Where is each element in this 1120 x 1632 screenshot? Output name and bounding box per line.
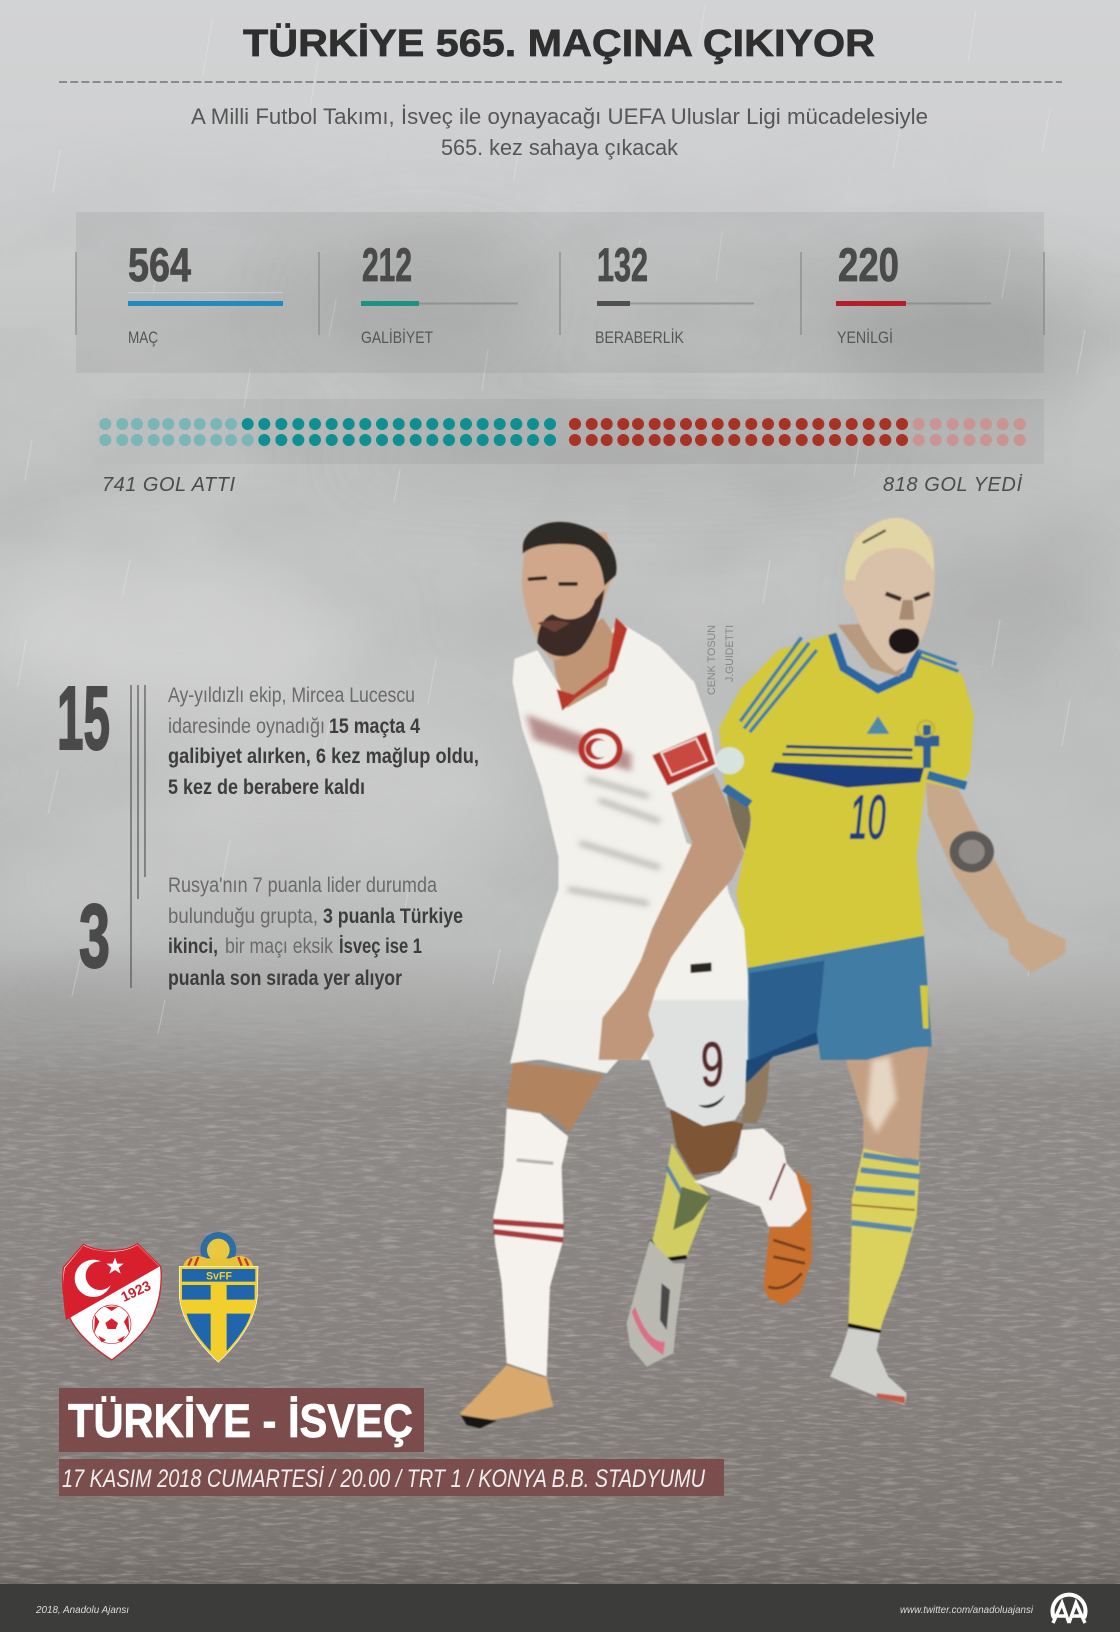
upper body, Swedish player <box>715 518 1066 1060</box>
big number 3: 3 <box>79 887 110 987</box>
match banner: TÜRKİYE - İSVEÇ <box>68 1394 413 1447</box>
text block: group standing: bir maçı eksik <box>225 935 333 958</box>
text block: coach record: 15 maçta 4 <box>329 715 420 738</box>
vertical rule lines <box>131 685 145 988</box>
text block: coach record: Ay-yıldızlı ekip, Mircea Lucescu <box>168 684 415 707</box>
match details banner: 17 KASIM 2018 CUMARTESİ / 20.00 / TRT 1 / KONYA B.B. STADYUMU <box>62 1465 706 1493</box>
stat: draws: 132 <box>597 238 648 291</box>
stat: wins <box>361 238 518 347</box>
icon: Anadolu Agency logo <box>1052 1595 1086 1623</box>
stat: losses: 220 <box>838 238 899 291</box>
text block: group standing: İsveç ise 1 <box>339 935 422 958</box>
title: TÜRKİYE 565. MAÇINA ÇIKIYOR <box>243 22 875 65</box>
panel: goals dot chart <box>76 399 1044 496</box>
stat: draws: BERABERLİK <box>595 328 685 347</box>
big number 15: 15 <box>57 669 110 769</box>
subtitle <box>191 104 928 160</box>
dots: goals scored <box>105 424 550 440</box>
subtitle: A Milli Futbol Takımı, İsveç ile oynayacağı UEFA Uluslar Ligi mücadelesiyle <box>191 104 928 129</box>
panel: match record stats <box>76 212 1044 373</box>
stat: matches: 564 <box>128 238 191 291</box>
stat: matches: MAÇ <box>128 328 158 347</box>
crest: Turkish Football Federation: 1923 <box>118 1277 153 1305</box>
figure: Swedish player <box>627 518 1066 1405</box>
text block: group standing: 3 puanla Türkiye <box>323 905 463 928</box>
text block: group standing <box>168 874 463 990</box>
label: goals conceded: 818 GOL YEDİ <box>883 474 1022 496</box>
text block: group standing: bulunduğu grupta, <box>168 905 318 928</box>
subtitle: 565. kez sahaya çıkacak <box>441 135 679 160</box>
twitter url: www.twitter.com/anadoluajansi <box>900 1604 1034 1616</box>
footer bar <box>0 1584 1120 1632</box>
text block: coach record <box>168 684 479 799</box>
lower body, Turkish player <box>460 1000 812 1428</box>
lower body, Turkish player: 9 <box>701 1030 724 1100</box>
photo credit <box>706 625 736 695</box>
text block: coach record: 5 kez de berabere kaldı <box>168 776 365 799</box>
text block: group standing: puanla son sırada yer alıyor <box>168 967 402 990</box>
dots: goals conceded <box>575 424 1020 440</box>
label: goals scored: 741 GOL ATTI <box>102 474 235 496</box>
stat: losses <box>836 238 991 347</box>
crest: Swedish Football Association <box>179 1232 258 1362</box>
lower body, Swedish player <box>627 1000 932 1405</box>
copyright: 2018, Anadolu Ajansı <box>35 1604 129 1616</box>
arm and head, Turkish player <box>522 522 744 1060</box>
crest: Swedish Football Association: SvFF <box>206 1271 232 1283</box>
text block: group standing: ikinci, <box>168 935 218 958</box>
shirt, Turkish player <box>513 618 748 1060</box>
figure: Turkish player <box>460 522 812 1428</box>
crest: Turkish Football Federation <box>63 1244 161 1360</box>
stat: wins: 212 <box>362 238 412 291</box>
match details banner <box>59 1459 724 1496</box>
stat: draws <box>595 238 754 347</box>
stat: wins: GALİBİYET <box>361 328 433 347</box>
dashed divider <box>59 81 1062 83</box>
text block: coach record: galibiyet alırken, 6 kez mağlup oldu, <box>168 745 479 768</box>
photo credit: CENK TOSUN <box>706 625 718 695</box>
photo credit: J.GUIDETTI <box>724 625 736 682</box>
stat: losses: YENİLGİ <box>837 328 893 347</box>
text block: coach record: idaresinde oynadığı <box>168 715 325 738</box>
upper body, Swedish player: 10 <box>849 782 886 852</box>
text block: group standing: Rusya'nın 7 puanla lider durumda <box>168 874 437 897</box>
stat: matches <box>128 238 283 347</box>
